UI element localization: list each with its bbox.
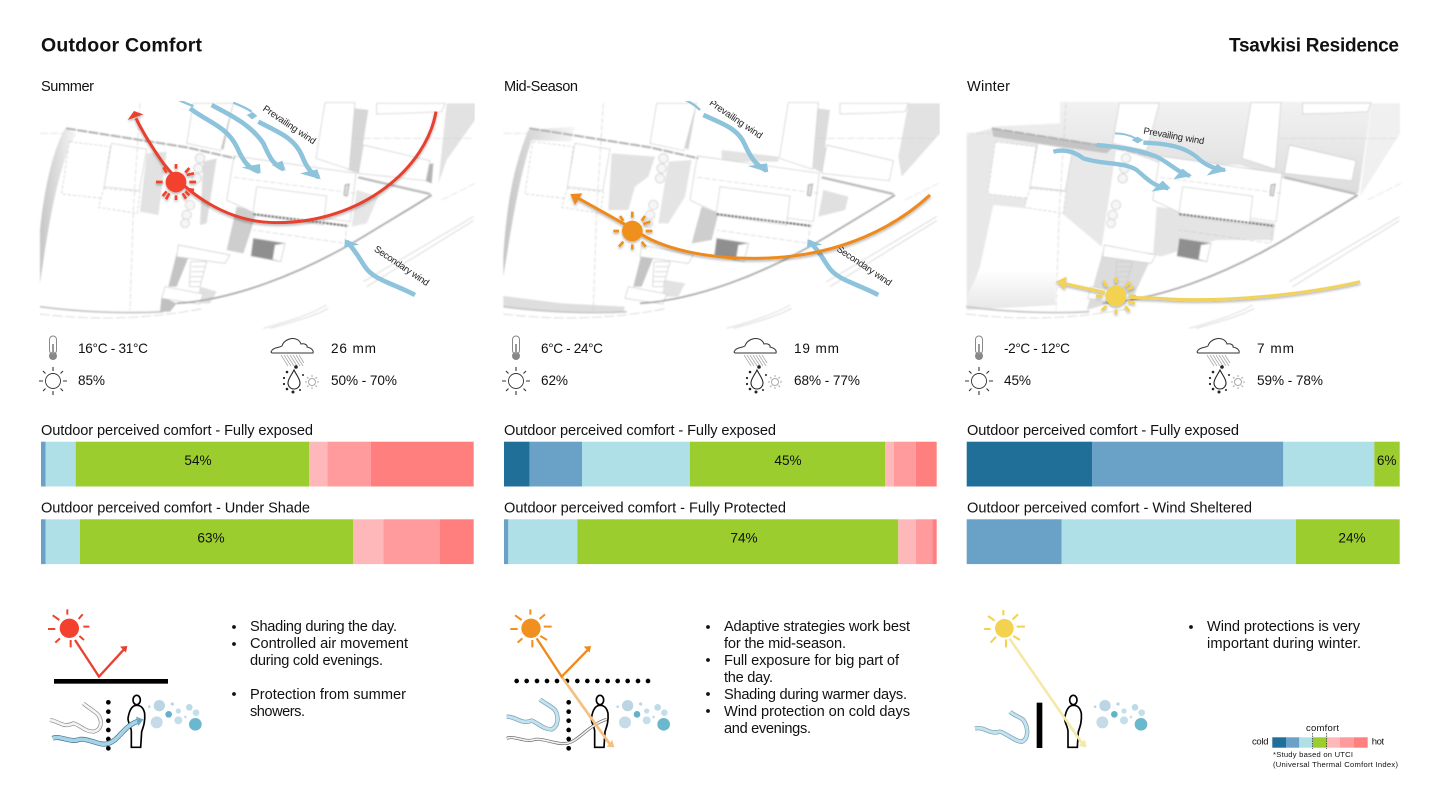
text block: mid-season strategies: for the mid-season. <box>724 636 846 652</box>
text block: winter strategies: important during winter. <box>1207 636 1361 652</box>
icon: sunshine <box>502 367 530 395</box>
title: Tsavkisi Residence: Tsavkisi Residence <box>1229 36 1399 56</box>
bar chart: fully exposed <box>41 442 474 486</box>
label: fully exposed: Outdoor perceived comfort - Fully exposed <box>967 423 1239 439</box>
text block: winter strategies: Wind protections is very <box>1207 619 1361 635</box>
diagram: mid-season strategy <box>507 609 670 751</box>
text block: summer strategies: Protection from summer <box>250 687 406 703</box>
heading: Winter: Winter <box>967 79 1010 95</box>
sunshine percentage: 45% <box>1004 373 1031 388</box>
icon: humidity <box>746 365 782 394</box>
site map: winter sun path and winds: Prevailing wind <box>1142 126 1205 147</box>
sunshine percentage: 62% <box>541 373 568 388</box>
text block: winter strategies <box>1189 619 1361 652</box>
text block: mid-season strategies: the day. <box>724 670 773 686</box>
text block: mid-season strategies <box>706 619 910 737</box>
heading: Mid-Season: Mid-Season <box>504 79 578 95</box>
rainfall: 26 mm <box>331 341 376 356</box>
text block: summer strategies: during cold evenings. <box>250 653 383 669</box>
site map: summer sun path and winds <box>40 97 475 328</box>
site map: summer sun path and winds: Secondary wind <box>372 244 431 289</box>
text block: summer strategies: Controlled air movement <box>250 636 408 652</box>
icon: sunshine <box>39 367 67 395</box>
site map: mid-season sun path and winds: Secondary wind <box>834 244 894 289</box>
icon: humidity <box>283 365 319 394</box>
legend: comfort scale: cold <box>1252 736 1268 748</box>
temperature range: -2°C - 12°C <box>1004 341 1070 356</box>
legend: comfort scale <box>1252 723 1398 769</box>
bar chart: fully protected: 74% <box>730 531 758 546</box>
text block: mid-season strategies: and evenings. <box>724 721 811 737</box>
bar chart: under shade: 63% <box>197 531 225 546</box>
text block: summer strategies <box>232 619 408 720</box>
text block: mid-season strategies: Full exposure for big part of <box>724 653 900 669</box>
text block: mid-season strategies: Adaptive strategies work best <box>724 619 910 635</box>
bar chart: fully exposed <box>504 442 937 486</box>
text block: mid-season strategies: Wind protection on cold days <box>724 704 910 720</box>
title: Outdoor Comfort: Outdoor Comfort <box>41 34 202 56</box>
temperature range: 6°C - 24°C <box>541 341 603 356</box>
icon: thermometer <box>975 336 983 360</box>
legend: comfort scale: (Universal Thermal Comfort Index) <box>1273 760 1398 769</box>
site map: winter sun path and winds <box>966 102 1401 328</box>
rainfall: 7 mm <box>1257 341 1294 356</box>
site map: mid-season sun path and winds: Prevailing wind <box>707 98 764 141</box>
rainfall: 19 mm <box>794 341 839 356</box>
text block: summer strategies: Shading during the day. <box>250 619 397 635</box>
icon: rain cloud <box>1197 338 1239 366</box>
legend: comfort scale: *Study based on UTCI <box>1273 750 1353 759</box>
icon: humidity <box>1209 365 1245 394</box>
icon: rain cloud <box>271 338 313 366</box>
humidity range: 50% - 70% <box>331 373 397 388</box>
diagram: summer strategy <box>48 609 202 751</box>
bar chart: fully protected <box>504 519 937 564</box>
site map: mid-season sun path and winds <box>503 96 940 328</box>
panel: summer <box>39 79 475 751</box>
bar chart: wind sheltered <box>967 519 1400 564</box>
legend: comfort scale: comfort <box>1306 723 1339 734</box>
bar chart: under shade <box>41 519 474 564</box>
label: fully exposed: Outdoor perceived comfort - Fully exposed <box>504 423 776 439</box>
site map: summer sun path and winds: Prevailing wind <box>260 103 318 147</box>
humidity range: 59% - 78% <box>1257 373 1323 388</box>
label: fully exposed: Outdoor perceived comfort - Fully exposed <box>41 423 313 439</box>
label: wind sheltered: Outdoor perceived comfort - Wind Sheltered <box>967 501 1252 517</box>
bar chart: fully exposed: 6% <box>1377 453 1397 468</box>
text block: mid-season strategies: Shading during warmer days. <box>724 687 907 703</box>
humidity range: 68% - 77% <box>794 373 860 388</box>
diagram: winter strategy <box>975 610 1147 748</box>
text block: summer strategies: showers. <box>250 704 305 720</box>
bar chart: fully exposed: 54% <box>184 453 212 468</box>
heading: Summer: Summer <box>41 79 94 95</box>
icon: thermometer <box>49 336 57 360</box>
panel: winter <box>965 79 1401 769</box>
bar chart: wind sheltered: 24% <box>1338 531 1366 546</box>
icon: sunshine <box>965 367 993 395</box>
bar chart: fully exposed <box>967 442 1400 486</box>
icon: thermometer <box>512 336 520 360</box>
icon: rain cloud <box>734 338 776 366</box>
panel: mid-season <box>502 79 940 751</box>
label: fully protected: Outdoor perceived comfort - Fully Protected <box>504 501 786 517</box>
label: under shade: Outdoor perceived comfort - Under Shade <box>41 501 310 517</box>
legend: comfort scale: hot <box>1372 736 1385 748</box>
sunshine percentage: 85% <box>78 373 105 388</box>
bar chart: fully exposed: 45% <box>774 453 802 468</box>
temperature range: 16°C - 31°C <box>78 341 148 356</box>
